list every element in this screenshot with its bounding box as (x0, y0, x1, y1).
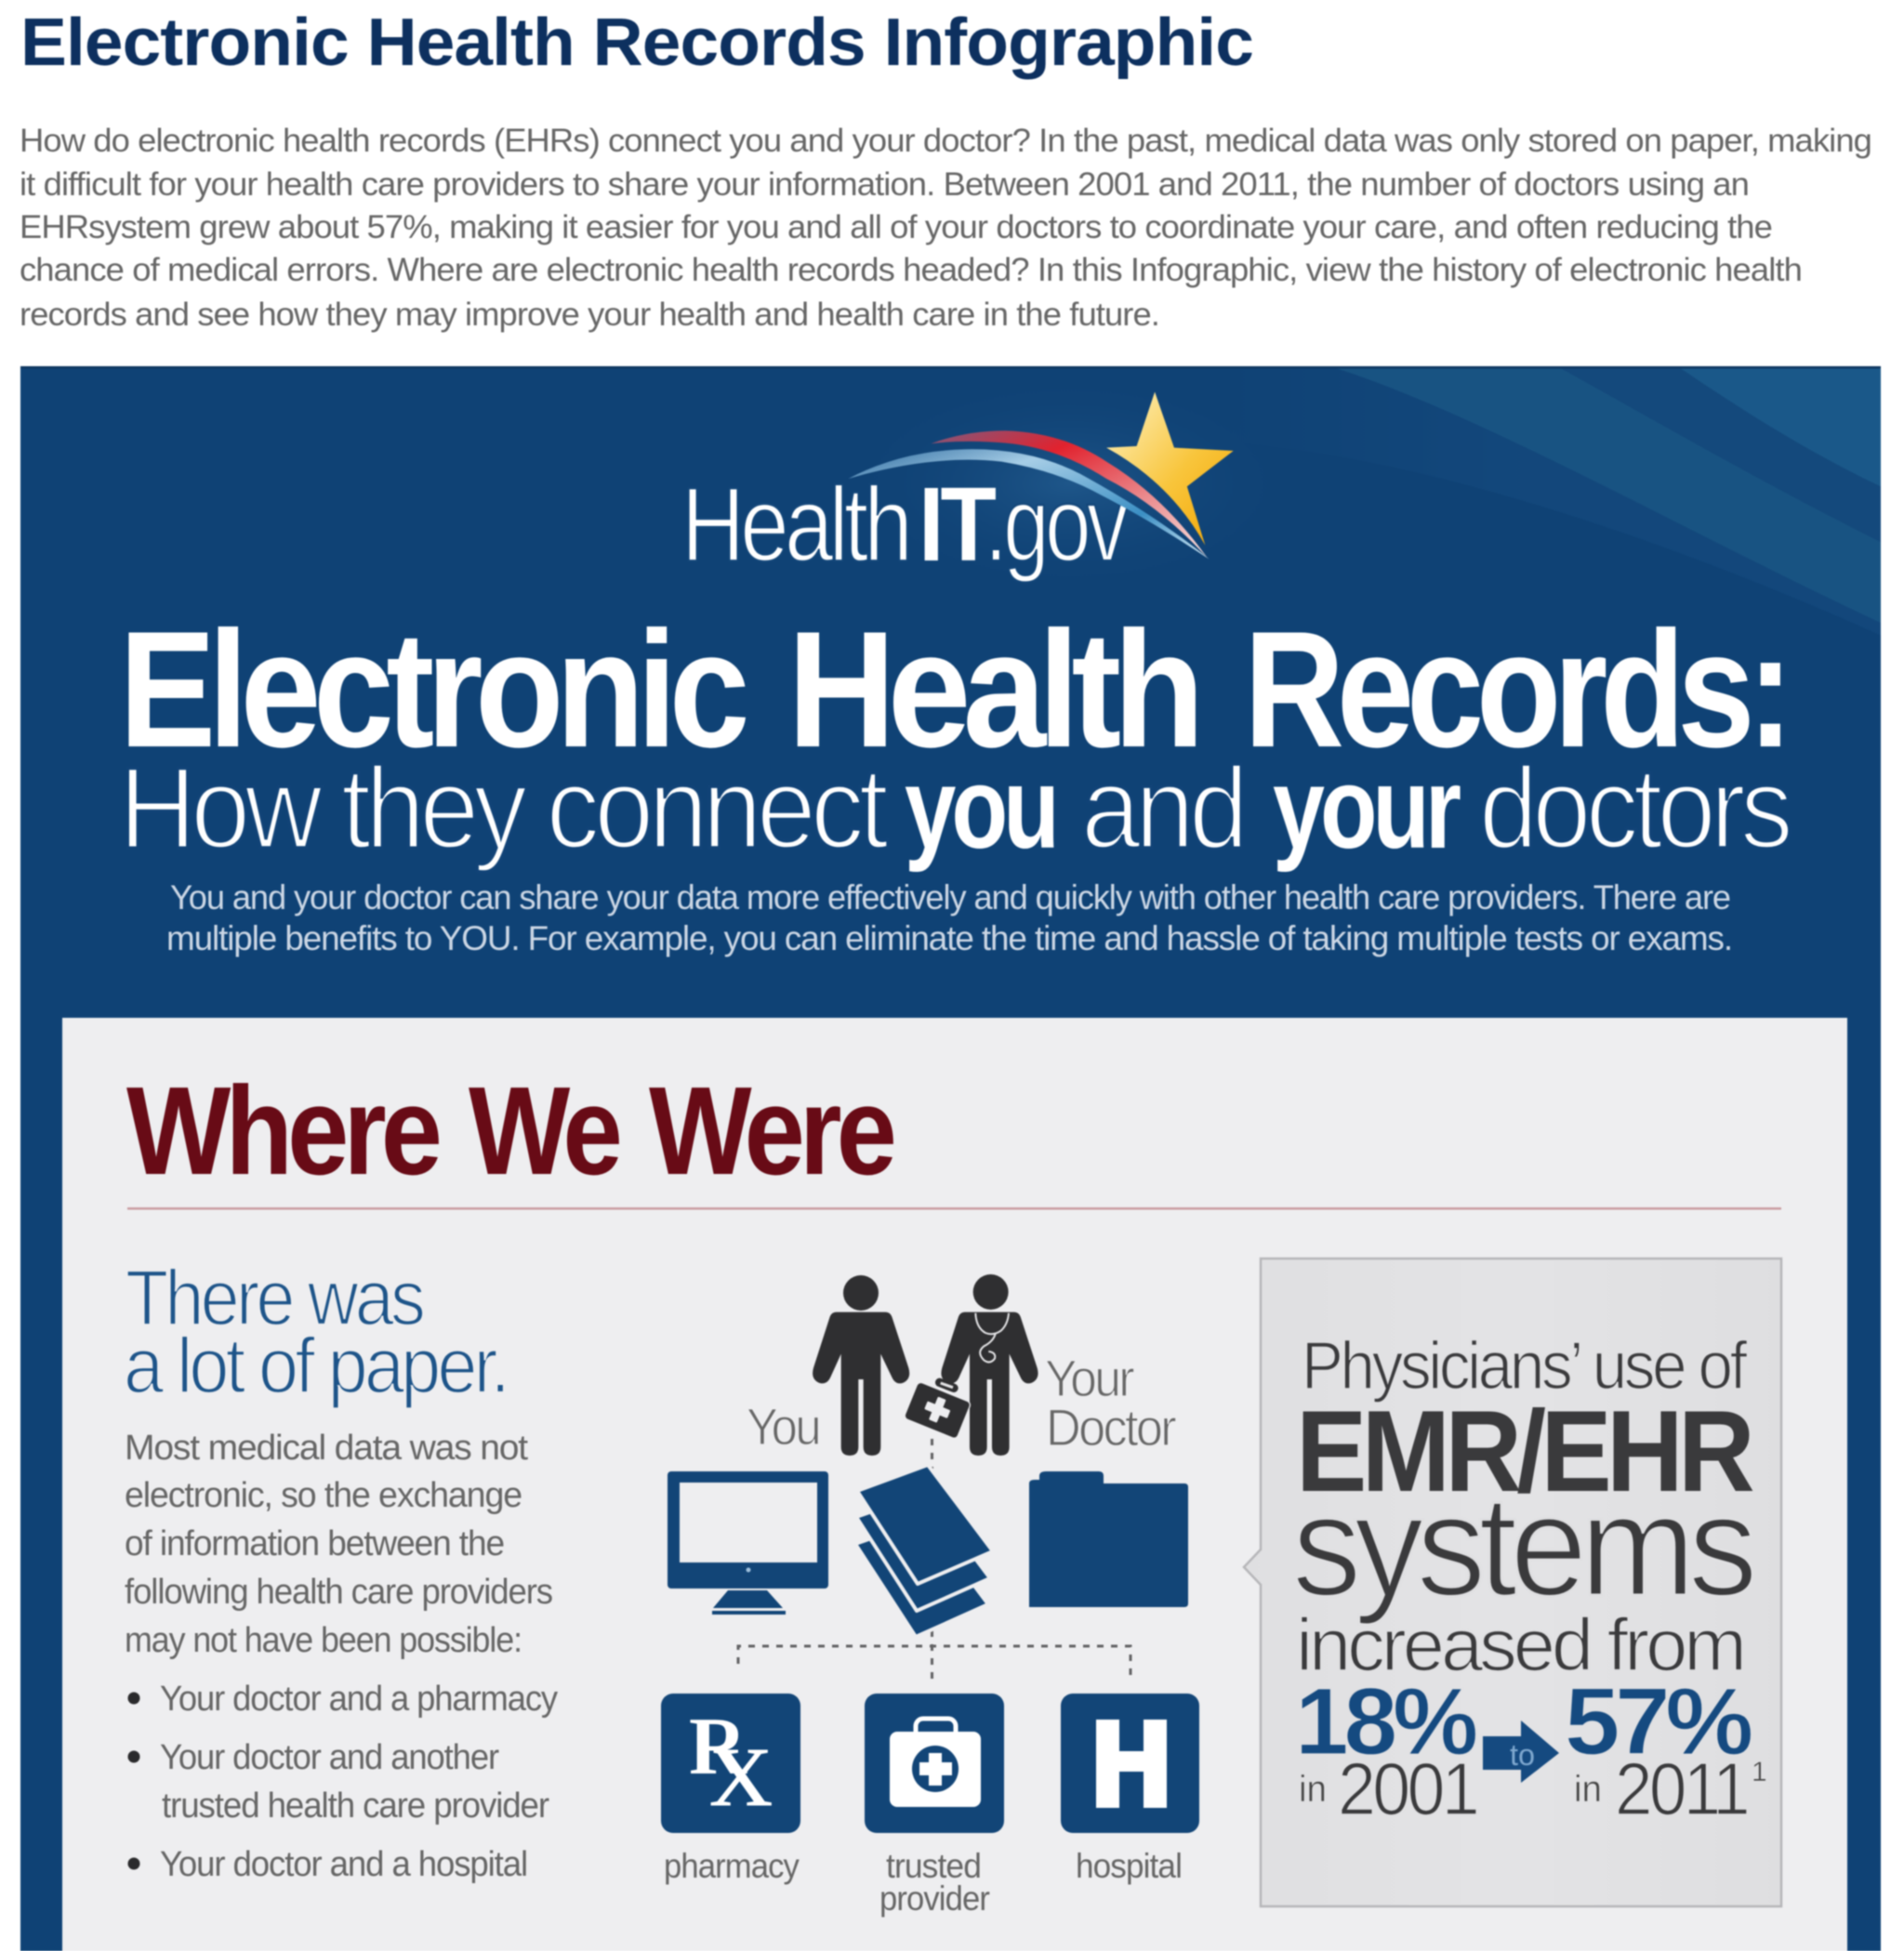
label: trusted provider: provider (879, 1879, 990, 1918)
panel: Where We Were (62, 1018, 1847, 1951)
callout heading: EMR/EHR (1296, 1388, 1752, 1516)
label: Your Doctor: Your (1045, 1349, 1134, 1407)
sub headline (119, 745, 1790, 873)
dashed connectors (738, 1439, 1130, 1679)
icon: patient and doctor figures (813, 1274, 1038, 1456)
stat: 57% in 2011: in (1574, 1769, 1602, 1810)
icon: pharmacy Rx tile (661, 1694, 800, 1833)
page title: Electronic Health Records Infographic (20, 6, 1253, 80)
logo: HealthIT.gov (681, 381, 1283, 586)
callout heading: increased from (1296, 1603, 1743, 1686)
stat: 57% in 2011: 2011 (1615, 1747, 1747, 1830)
icon: pharmacy Rx tile: R (689, 1702, 747, 1792)
intro text block: it difficult for your health care providers to share your information. Between 2001 and 2011, the number of doctors using an (20, 166, 1749, 203)
left text block: electronic, so the exchange (125, 1476, 522, 1515)
bullet list: Your doctor and a hospital (160, 1845, 527, 1884)
left text block: Most medical data was not (125, 1429, 529, 1468)
icon: pharmacy Rx tile: X (709, 1732, 773, 1824)
left text block: of information between the (125, 1524, 504, 1563)
icon: computer monitor (668, 1471, 828, 1615)
arrow: to (1483, 1720, 1559, 1783)
section heading (126, 1061, 893, 1201)
callout heading: Physicians’ use of (1302, 1329, 1748, 1404)
sub headline: How they connect (119, 745, 888, 873)
bullet list: trusted health care provider (162, 1786, 549, 1826)
intro paragraph on blue: multiple benefits to YOU. For example, you can eliminate the time and hassle of taking multiple tests or exams. (166, 919, 1732, 957)
icon: hospital H tile (1061, 1694, 1199, 1833)
stat: 18% in 2001 (1295, 1668, 1476, 1830)
logo wordmark: Health (681, 466, 908, 583)
section heading: Were (649, 1061, 893, 1201)
intro text block: records and see how they may improve your health and health care in the future. (20, 297, 1159, 333)
label: pharmacy: pharmacy (664, 1847, 800, 1885)
icon: trusted provider medical bag tile (865, 1694, 1004, 1833)
sub headline: you (905, 745, 1055, 873)
subheading: There was a lot of paper: There was (126, 1254, 423, 1341)
bullet list: Your doctor and another (160, 1738, 499, 1777)
intro paragraph on blue: You and your doctor can share your data more effectively and quickly with other health care providers. There are (170, 878, 1730, 916)
icon: stack of paper (855, 1465, 993, 1637)
callout: physicians' use of EMR/EHR systems (1244, 1259, 1781, 1906)
main headline: Electronic (119, 597, 746, 782)
left text block: following health care providers (125, 1573, 552, 1612)
logo wordmark (681, 466, 1129, 583)
label: You: You (747, 1397, 819, 1456)
logo wordmark: IT (919, 466, 996, 583)
label: trusted provider: trusted (886, 1847, 981, 1885)
intro text block: How do electronic health records (EHRs) connect you and your doctor? In the past, medical data was only stored on paper, making (20, 123, 1871, 159)
left text block (125, 1429, 552, 1660)
intro text block: chance of medical errors. Where are electronic health records headed? In this Infographic, view the history of electronic health (20, 252, 1802, 288)
callout heading: systems (1292, 1466, 1753, 1626)
section heading: We (469, 1061, 619, 1201)
main headline: Health (787, 597, 1197, 782)
sub headline: doctors (1479, 745, 1790, 873)
arrow: to: to (1510, 1738, 1535, 1772)
stat: 18% in 2001: in (1299, 1769, 1327, 1810)
stat: 18% in 2001: 18% (1295, 1668, 1475, 1774)
bullet list (128, 1680, 558, 1884)
left text block: may not have been possible: (125, 1621, 522, 1660)
stat: 57% in 2011 (1565, 1668, 1767, 1830)
stat: 18% in 2001: 2001 (1338, 1747, 1476, 1830)
panel: blue infographic background (20, 366, 1887, 1951)
label: trusted provider (879, 1847, 990, 1918)
intro text block: EHRsystem grew about 57%, making it easier for you and all of your doctors to coordinate your care, and often reducing the (20, 209, 1772, 245)
main headline (119, 597, 1786, 782)
bullet list: Your doctor and a pharmacy (160, 1680, 558, 1719)
logo star and swooshes (849, 392, 1234, 560)
stat: 57% in 2011: 1 (1752, 1757, 1767, 1787)
main headline: Records: (1244, 597, 1786, 782)
callout heading (1292, 1329, 1753, 1686)
subheading: There was a lot of paper (124, 1254, 507, 1409)
sub headline: and (1081, 745, 1243, 873)
label: Your Doctor (1045, 1349, 1176, 1457)
icon: file folder (1029, 1471, 1188, 1607)
sub headline: your (1273, 745, 1461, 873)
logo wordmark: .gov (985, 466, 1129, 583)
section heading: Where (126, 1061, 439, 1201)
subheading: There was a lot of paper: a lot of paper. (124, 1322, 507, 1409)
label: Your Doctor: Doctor (1046, 1398, 1176, 1457)
intro text block (20, 123, 1871, 333)
label: hospital: hospital (1076, 1847, 1182, 1885)
stat: 57% in 2011: 57% (1565, 1668, 1752, 1774)
intro paragraph on blue (166, 878, 1732, 957)
